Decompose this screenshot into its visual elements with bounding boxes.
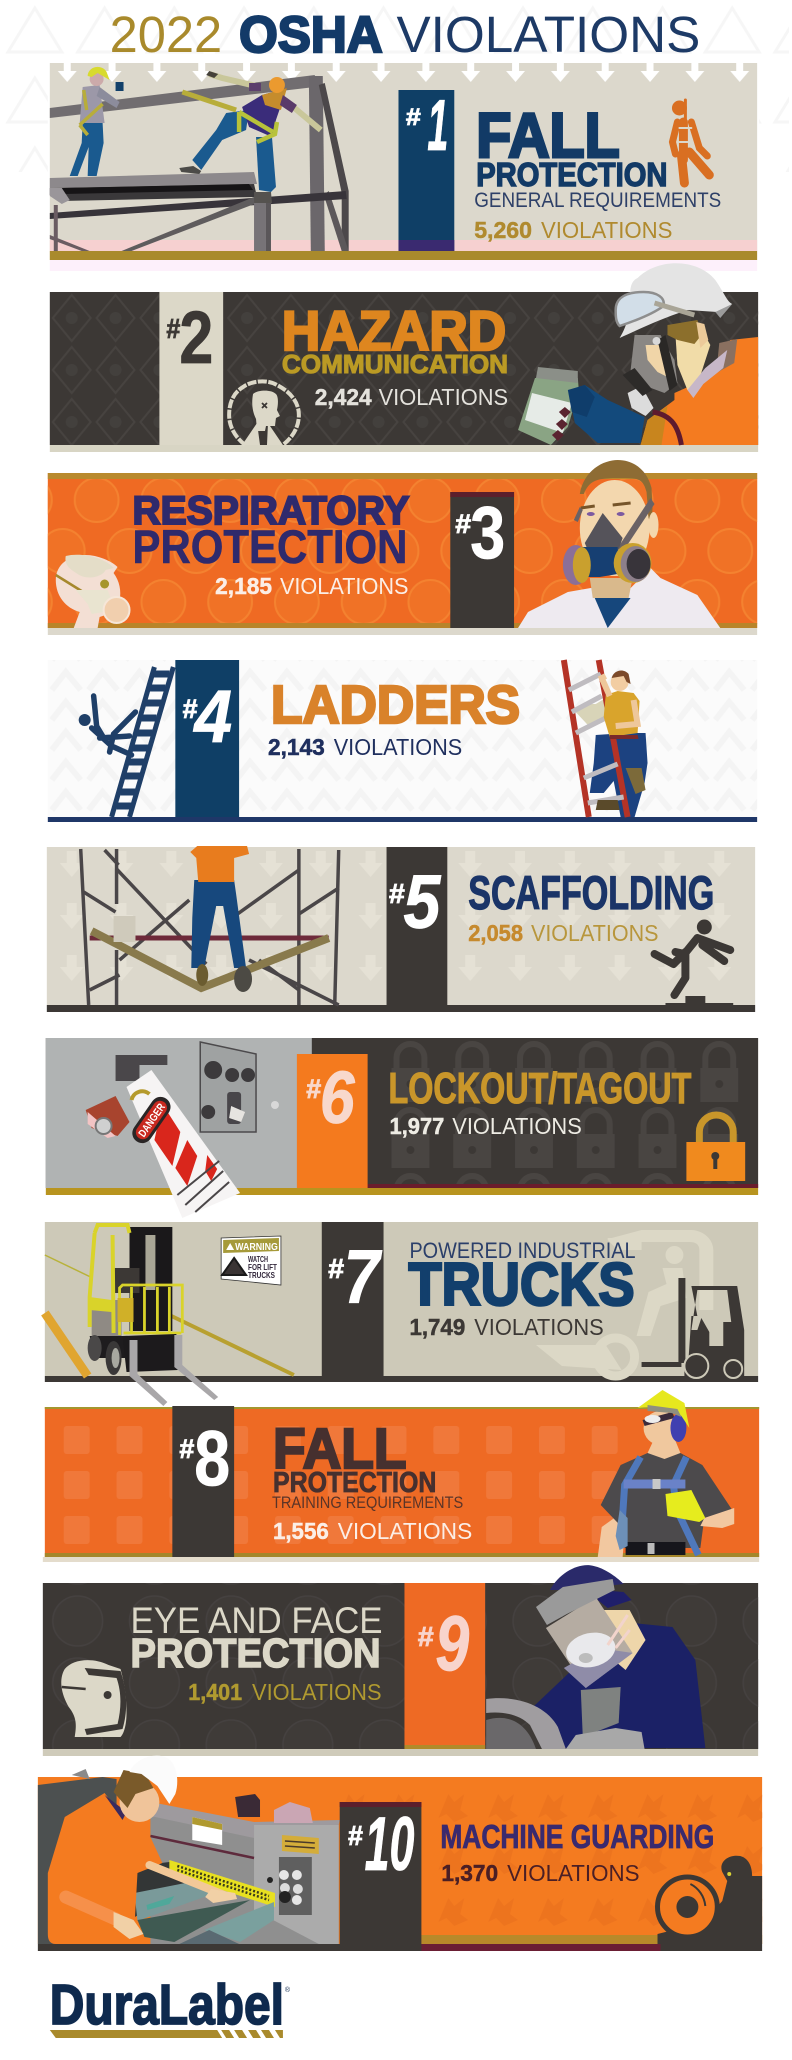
illustration: right worker <box>179 71 321 203</box>
violation count: VIOLATIONS <box>541 217 672 243</box>
violation count: 2,143 <box>268 734 325 760</box>
banner background <box>46 1038 758 1195</box>
number box: 6 <box>320 1056 355 1139</box>
panel: #1 fall protection <box>50 63 757 271</box>
arrow row <box>50 63 757 83</box>
number box <box>175 660 239 817</box>
illustration: floor lines <box>45 1255 294 1376</box>
violation count: VIOLATIONS <box>334 734 462 760</box>
number box: # <box>306 1074 321 1104</box>
heading: LADDERS <box>271 675 520 735</box>
banner background <box>50 63 757 251</box>
number box <box>322 1222 384 1376</box>
violation count: 1,977 <box>390 1113 444 1139</box>
faint warning-triangle background <box>0 4 789 172</box>
logo: DuraLabel: DuraLabel <box>50 1973 284 2037</box>
number box <box>172 1406 234 1557</box>
number box <box>404 1583 485 1749</box>
number box: # <box>348 1820 363 1851</box>
illustration: yellow forklift <box>88 1225 218 1406</box>
heading: FALL <box>273 1417 406 1481</box>
violation count: 1,401 <box>188 1679 242 1705</box>
panel: #7 powered industrial trucks <box>45 1222 758 1406</box>
illustration: danger tag and padlock <box>86 1070 240 1218</box>
number box: 4 <box>192 675 232 758</box>
icon: head with respirator <box>56 555 130 628</box>
title <box>110 6 700 63</box>
violation count <box>441 1860 640 1886</box>
sign: warning lift trucks: WARNING <box>235 1242 278 1253</box>
sign: warning lift trucks <box>221 1236 281 1285</box>
number box: # <box>182 694 197 724</box>
number box: # <box>328 1253 344 1284</box>
violation count <box>390 1113 582 1139</box>
heading: MACHINE GUARDING <box>440 1818 714 1855</box>
heading: TRAINING REQUIREMENTS <box>272 1493 463 1512</box>
title: VIOLATIONS <box>396 6 700 63</box>
panel: #4 ladders <box>48 660 757 822</box>
number box: # <box>405 104 421 131</box>
number box: 2 <box>179 296 213 379</box>
number box: 7 <box>344 1235 383 1320</box>
heading: LOCKOUT/TAGOUT <box>389 1064 692 1113</box>
heading: PROTECTION <box>132 521 407 573</box>
heading: POWERED INDUSTRIAL <box>409 1238 636 1263</box>
icon: falling figure and ladder <box>79 667 173 817</box>
number box <box>159 292 223 445</box>
number box: 10 <box>365 1802 414 1887</box>
violation count: 5,260 <box>474 217 532 243</box>
heading: GENERAL REQUIREMENTS <box>474 189 721 212</box>
panel: #10 machine guarding <box>38 1756 762 1951</box>
number box <box>398 86 454 251</box>
sign: warning lift trucks: WATCH <box>248 1255 268 1264</box>
icon: forklift silhouette <box>642 1278 744 1378</box>
violation count: VIOLATIONS <box>452 1113 582 1139</box>
number box <box>340 1802 421 1944</box>
illustration: operator at machine <box>48 1756 237 1944</box>
icon: tripping figure <box>655 920 733 1005</box>
number box: # <box>179 1434 194 1464</box>
heading <box>132 489 409 573</box>
number box: 8 <box>194 1416 230 1502</box>
illustration: worker with chemical jar <box>518 263 758 445</box>
panel: #3 respiratory protection <box>48 460 757 635</box>
number box: 3 <box>470 491 505 574</box>
icon: person caught in rollers <box>658 1856 762 1944</box>
violation count <box>188 1679 382 1705</box>
illustration: worker with harness <box>598 1390 734 1557</box>
heading: PROTECTION <box>131 1630 381 1676</box>
title: OSHA <box>239 6 383 63</box>
violation count: VIOLATIONS <box>280 573 408 599</box>
icon: fall harness figure <box>672 100 709 183</box>
heading: EYE AND FACE <box>131 1600 383 1641</box>
panel: #8 fall protection training <box>43 1390 759 1562</box>
violation count: VIOLATIONS <box>379 384 508 410</box>
title: 2022 <box>110 6 222 63</box>
illustration: steel frame <box>50 75 349 251</box>
banner background <box>43 1583 758 1756</box>
icon: toxic lungs <box>229 381 299 445</box>
heading: PROTECTION <box>273 1467 436 1499</box>
panel: #6 lockout/tagout <box>46 1038 758 1218</box>
violation count <box>468 920 659 946</box>
violation count <box>268 734 462 760</box>
illustration: left worker <box>70 67 124 176</box>
banner background <box>50 292 758 452</box>
violation count <box>409 1314 604 1340</box>
heading: COMMUNICATION <box>282 351 508 379</box>
bottom band <box>50 240 757 271</box>
heading <box>474 101 721 212</box>
heading <box>272 1417 463 1512</box>
panel: #9 eye and face protection <box>43 1565 758 1756</box>
banner background <box>43 1407 759 1562</box>
violation count <box>215 573 408 599</box>
illustration: man with half-mask respirator <box>518 460 720 628</box>
violation count: VIOLATIONS <box>338 1518 472 1544</box>
number box <box>387 847 447 1005</box>
number box <box>297 1054 368 1188</box>
banner background <box>38 1777 762 1951</box>
banner background <box>47 847 755 1012</box>
number box <box>450 491 514 628</box>
icon: head with face shield <box>61 1660 127 1737</box>
banner background <box>48 660 757 822</box>
violation count: 2,185 <box>215 573 272 599</box>
violation count <box>273 1518 472 1544</box>
violation count: 2,424 <box>315 384 372 410</box>
heading: HAZARD <box>282 299 506 362</box>
violation count: 1,370 <box>441 1860 498 1886</box>
number box: # <box>417 1621 434 1652</box>
illustration: machine <box>38 1769 340 1944</box>
violation count: 1,556 <box>273 1518 329 1544</box>
faint forklift driver icon <box>536 1230 713 1376</box>
number box: # <box>389 878 405 909</box>
banner background <box>48 473 757 635</box>
sign: warning lift trucks: TRUCKS <box>248 1271 275 1280</box>
violation count: VIOLATIONS <box>252 1679 382 1705</box>
logo: DuraLabel: ® <box>285 1986 291 1994</box>
violation count: VIOLATIONS <box>507 1860 640 1886</box>
heading <box>131 1600 383 1676</box>
panel: #5 scaffolding <box>47 846 755 1012</box>
number box: # <box>166 313 181 344</box>
violation count: VIOLATIONS <box>474 1314 604 1340</box>
icon: padlock <box>686 1115 745 1181</box>
illustration: worker climbing ladder <box>564 660 648 817</box>
heading: TRUCKS <box>408 1251 635 1318</box>
violation count: VIOLATIONS <box>531 920 659 946</box>
violation count <box>474 217 672 243</box>
banner background <box>45 1222 758 1382</box>
illustration: danger tag and padlock: DANGER <box>136 1102 168 1140</box>
violation count: 2,058 <box>468 920 523 946</box>
sign: warning lift trucks: FOR LIFT <box>248 1263 277 1272</box>
illustration: control panel <box>116 1042 279 1132</box>
heading: RESPIRATORY <box>132 489 409 533</box>
illustration: scaffold and worker <box>81 846 339 1005</box>
number box: # <box>455 509 471 539</box>
number box: 5 <box>403 860 442 945</box>
violation count <box>315 384 508 410</box>
number box: 9 <box>435 1601 469 1687</box>
heading: FALL <box>476 101 620 171</box>
number box: 1 <box>427 86 448 166</box>
illustration: welder with face shield <box>486 1565 705 1749</box>
violation count: 1,749 <box>409 1314 465 1340</box>
heading: PROTECTION <box>476 156 667 193</box>
panel: #2 hazard communication <box>50 263 758 452</box>
